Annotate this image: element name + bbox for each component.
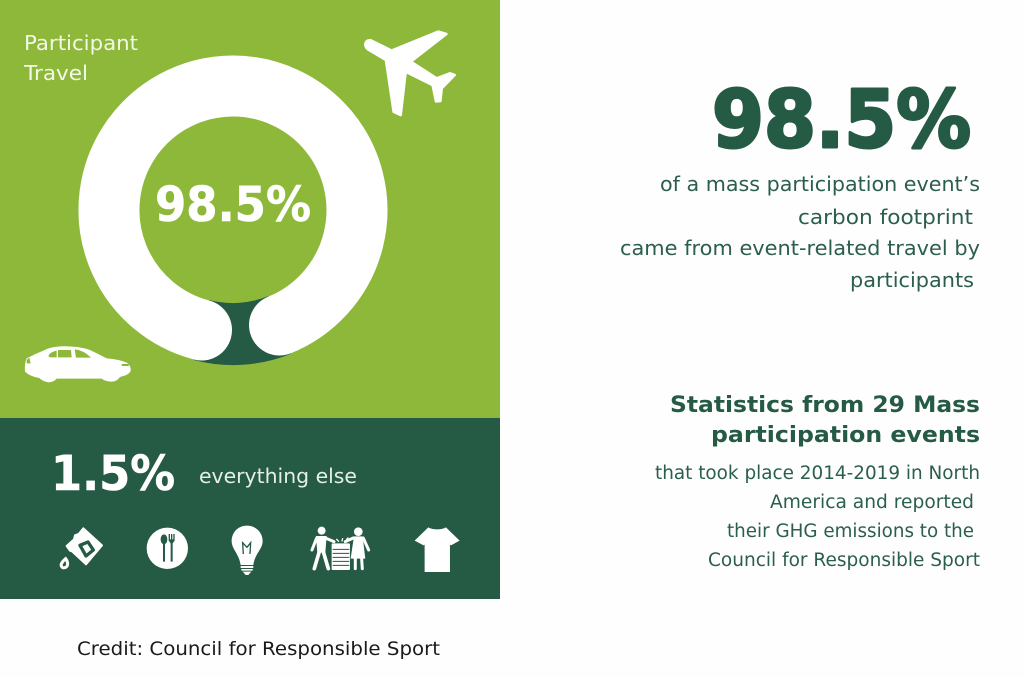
donut chart [109,86,357,334]
statistics description: Council for Responsible Sport [708,550,980,571]
stat description: of a mass participation event’s [660,172,980,196]
label: participant travel: Participant [24,31,138,55]
credit: Credit: Council for Responsible Sport [77,638,440,660]
label: participant travel: Travel [23,61,88,85]
statistics description: America and reported [770,492,974,513]
icon: plate and cutlery [147,528,188,569]
icon: airplane [365,32,455,115]
statistics description: their GHG emissions to the [727,521,974,542]
stat description: came from event-related travel by [620,236,980,260]
stat description [620,172,980,292]
icon: car [25,346,131,382]
stat description: participants [850,268,974,292]
panel: everything else [0,418,500,599]
icon: t-shirt [415,527,460,572]
panel: participant travel [0,0,500,418]
statistics description [655,463,980,571]
headline stat: 98.5% [712,74,971,166]
value: 1.5%: 1.5% [51,446,175,502]
statistics heading: participation events [711,422,980,448]
icon: light bulb [232,526,263,575]
label: everything else: everything else [199,464,357,488]
statistics heading: Statistics from 29 Mass [670,392,980,418]
donut value: 98.5% [155,177,311,233]
icon: people with recycling bin [312,527,369,570]
statistics description: that took place 2014-2019 in North [655,463,980,484]
statistics heading [670,392,980,448]
stat description: carbon footprint [798,205,973,229]
icon: fuel canister [61,528,102,568]
label: participant travel [23,31,138,85]
